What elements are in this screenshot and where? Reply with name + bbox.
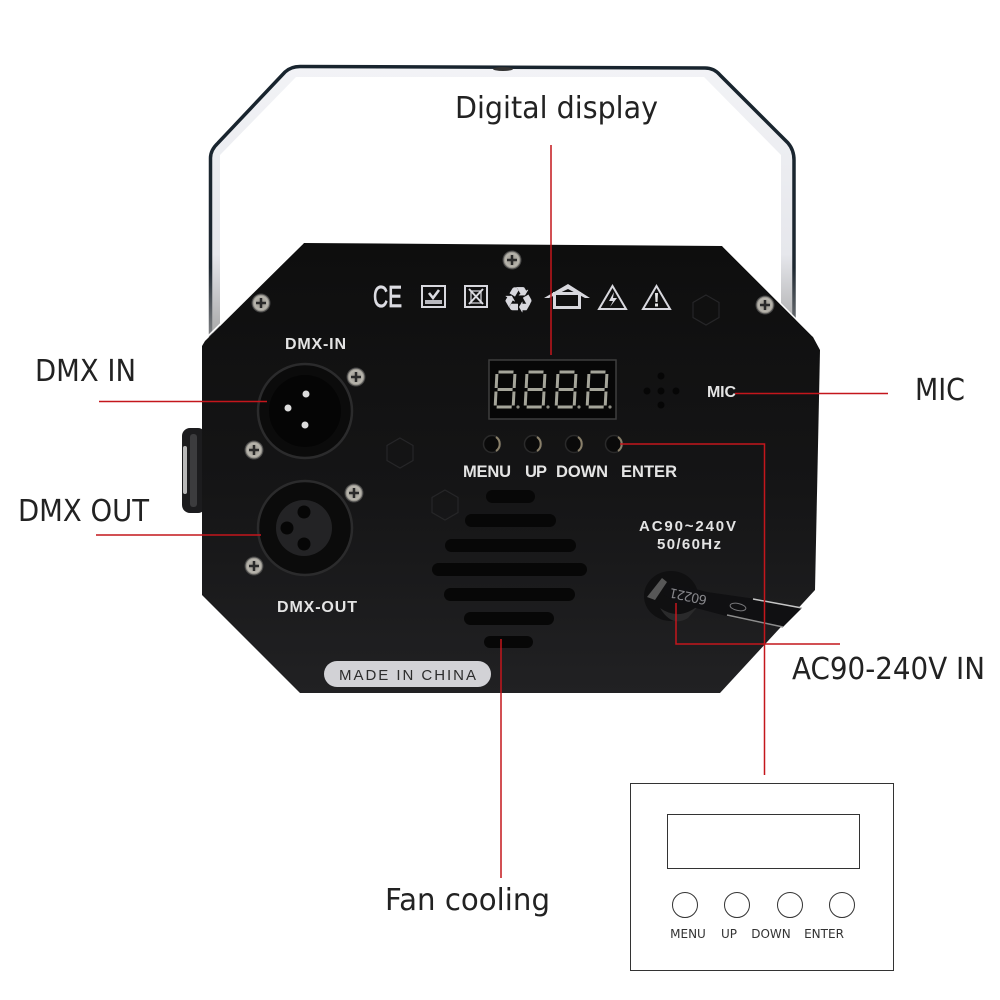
voltage label: AC90~240V	[639, 518, 736, 535]
label: MIC: MIC	[915, 373, 965, 408]
white edge next to bracket	[204, 243, 813, 340]
made in china badge	[324, 661, 491, 687]
device body	[202, 243, 820, 693]
certification icons: CE	[373, 279, 402, 314]
power cable: 60221	[668, 584, 708, 607]
mounting bracket	[210, 66, 794, 340]
panel diagram: DOWN	[751, 927, 791, 941]
certification icons: ♻	[503, 281, 534, 321]
button labels: ENTER	[621, 463, 677, 481]
power cable	[644, 571, 802, 627]
DMX-IN label: DMX-IN	[285, 336, 346, 353]
label: DMX IN: DMX IN	[35, 354, 136, 389]
button labels: DOWN	[556, 463, 608, 481]
panel diagram: MENU	[670, 927, 706, 941]
panel diagram	[630, 784, 894, 970]
made in china badge: MADE IN CHINA	[339, 667, 476, 684]
embossed hexagons	[387, 295, 719, 520]
digital display	[489, 360, 616, 419]
buttons	[484, 436, 622, 452]
label: DMX OUT: DMX OUT	[18, 494, 150, 529]
label: digital display: Digital display	[455, 91, 658, 126]
voltage label: 50/60Hz	[657, 536, 721, 553]
certification icons	[373, 279, 670, 321]
DMX-IN connector	[258, 364, 352, 458]
MIC label: MIC	[707, 384, 736, 401]
panel diagram: UP	[721, 927, 737, 941]
side knob	[182, 428, 206, 513]
panel diagram: ENTER	[804, 927, 844, 941]
label: AC input: AC90-240V IN	[792, 652, 985, 687]
DMX-OUT label: DMX-OUT	[277, 599, 357, 616]
button labels: UP	[525, 463, 547, 481]
label: fan cooling: Fan cooling	[385, 883, 550, 918]
label: AC input	[676, 603, 985, 687]
button labels	[463, 463, 677, 481]
DMX-OUT connector	[258, 481, 352, 575]
voltage label	[639, 518, 736, 553]
button labels: MENU	[463, 463, 511, 481]
MIC holes	[644, 372, 680, 408]
fan vents	[432, 490, 587, 648]
connector line to panel diagram	[620, 444, 764, 775]
screws	[245, 251, 774, 575]
